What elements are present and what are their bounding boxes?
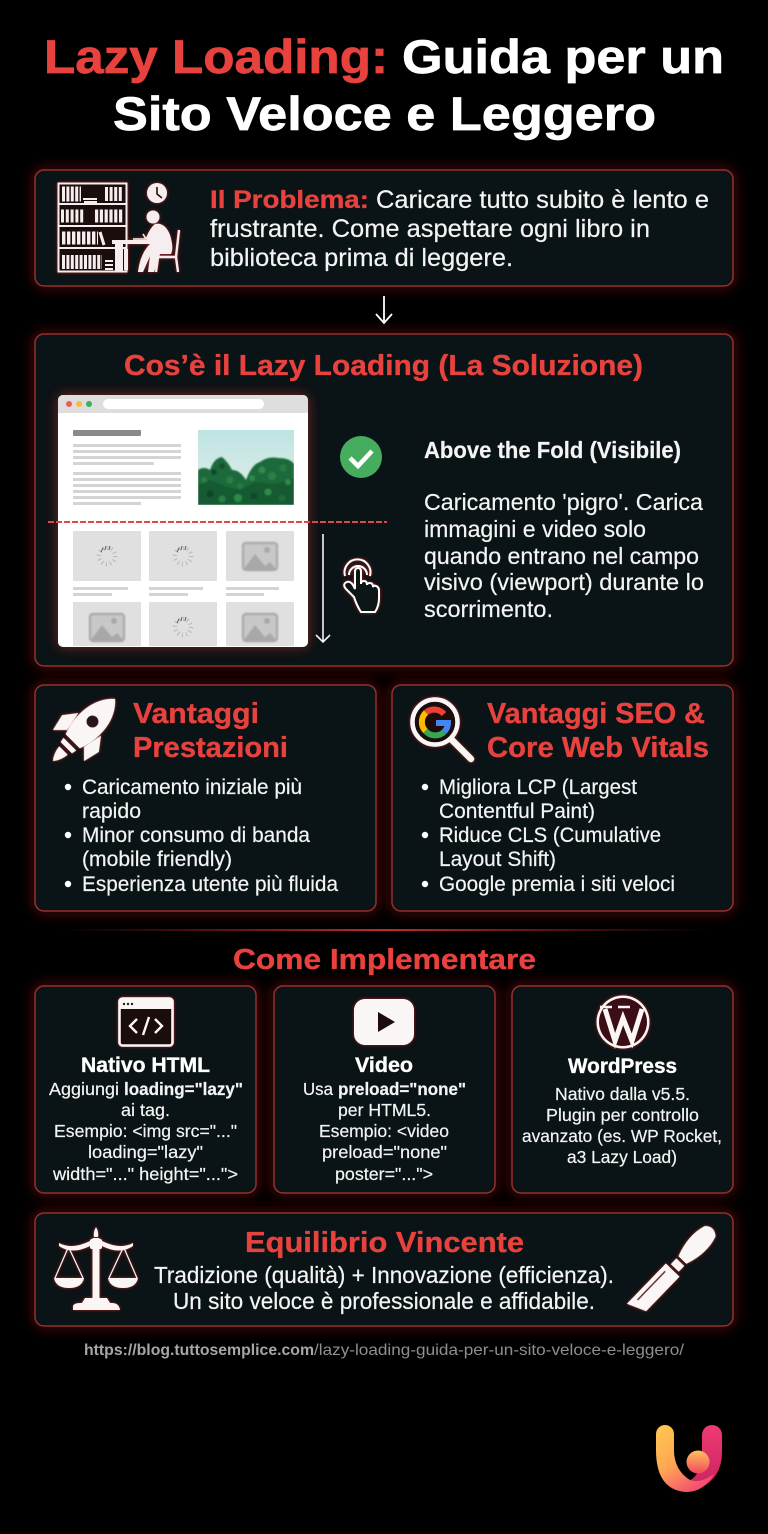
icon: check <box>340 436 382 478</box>
title: Lazy Loading: <box>44 30 388 83</box>
text: above the fold: Caricamento 'pigro'. Carica <box>424 489 703 515</box>
logo <box>656 1425 722 1492</box>
heading: prestazioni: Prestazioni <box>133 732 288 764</box>
text: equilibrio: Un sito veloce è professionale e affidabile. <box>173 1288 595 1314</box>
card: wordpress <box>512 986 733 1193</box>
icon: rocket <box>35 681 133 779</box>
title: Sito Veloce e Leggero <box>113 87 656 140</box>
list: prestazioni: (mobile friendly) <box>82 847 232 871</box>
text: above the fold: Above the Fold (Visibile) <box>424 437 681 463</box>
list: seo: Migliora LCP (Largest <box>439 775 637 799</box>
text: problema: Il Problema: <box>210 186 369 214</box>
text: wordpress: avanzato (es. WP Rocket, <box>522 1126 722 1146</box>
text: wordpress: Nativo dalla v5.5. <box>555 1084 690 1104</box>
text: nativo html: width="..." height="..."> <box>52 1164 238 1184</box>
text: video: Usa <box>303 1079 333 1099</box>
text: above the fold <box>424 437 704 622</box>
text: nativo html <box>49 1054 243 1184</box>
heading: prestazioni <box>133 698 288 764</box>
text: equilibrio: Equilibrio Vincente <box>245 1227 524 1259</box>
title <box>44 30 724 140</box>
text: wordpress <box>522 1055 722 1167</box>
text: wordpress: Plugin per controllo <box>546 1105 699 1125</box>
list: seo: Google premia i siti veloci <box>439 872 675 896</box>
panel: vantaggi prestazioni <box>35 681 376 911</box>
text: video: Video <box>355 1054 413 1077</box>
fold line <box>48 521 387 523</box>
arrow: down <box>376 296 392 323</box>
list: seo <box>422 775 675 896</box>
text: video: preload="none" <box>322 1142 447 1162</box>
text: equilibrio: Tradizione (qualità) + Innovazione (efficienza). <box>154 1262 614 1288</box>
heading: seo: Core Web Vitals <box>487 732 709 764</box>
list: prestazioni <box>65 775 338 896</box>
panel: soluzione <box>35 334 733 1492</box>
text: wordpress: a3 Lazy Load) <box>567 1147 677 1167</box>
card: nativo html <box>35 986 256 1193</box>
list: seo: Riduce CLS (Cumulative <box>439 823 661 847</box>
icon: code window <box>120 998 172 1046</box>
text: nativo html: Esempio: <img src="..." <box>54 1121 237 1141</box>
icon: scales <box>54 1227 138 1310</box>
text: video: Esempio: <video <box>319 1121 449 1141</box>
list: seo: Contentful Paint) <box>439 799 595 823</box>
title: Guida per un <box>402 30 724 83</box>
source url <box>84 1342 685 1359</box>
icon: google magnifier <box>412 700 471 759</box>
icon: wordpress logo <box>596 996 650 1048</box>
list: prestazioni: rapido <box>82 799 141 823</box>
panel: vantaggi seo <box>392 685 733 911</box>
text: video <box>303 1054 466 1184</box>
text: nativo html: loading="lazy" <box>88 1142 203 1162</box>
list: prestazioni: Minor consumo di banda <box>82 823 310 847</box>
text: above the fold: immagini e video solo <box>424 516 646 542</box>
text: nativo html: ai tag. <box>121 1100 170 1120</box>
heading: seo: Vantaggi SEO & <box>487 698 705 730</box>
text: above the fold: scorrimento. <box>424 596 553 622</box>
list: prestazioni: Esperienza utente più fluida <box>82 872 338 896</box>
text: above the fold: visivo (viewport) durante lo <box>424 569 704 595</box>
icon: chisel <box>627 1222 720 1317</box>
browser mockup <box>48 395 704 647</box>
text: problema: biblioteca prima di leggere. <box>210 244 513 272</box>
panel: equilibrio vincente <box>35 1213 733 1326</box>
text: problema: frustrante. Come aspettare ogni libro in <box>210 215 650 243</box>
text: equilibrio <box>154 1227 614 1314</box>
text: wordpress: WordPress <box>568 1055 677 1078</box>
heading: prestazioni: Vantaggi <box>133 698 259 730</box>
source url: /lazy-loading-guida-per-un-sito-veloce-e-leggero/ <box>314 1342 685 1359</box>
icon: play button <box>354 999 414 1045</box>
list: prestazioni: Caricamento iniziale più <box>82 775 302 799</box>
heading: seo <box>487 698 709 764</box>
photo: trees <box>198 430 294 505</box>
card: video <box>274 986 495 1193</box>
heading: come implementare: Come Implementare <box>233 944 536 976</box>
text: problema <box>210 186 709 272</box>
text: nativo html: Nativo HTML <box>81 1054 210 1077</box>
arrow: scroll <box>316 534 330 642</box>
text: problema: Caricare tutto subito è lento e <box>376 186 709 214</box>
heading: soluzione: Cos’è il Lazy Loading (La Soluzione) <box>124 350 643 382</box>
text: above the fold: quando entrano nel campo <box>424 543 699 569</box>
icon: hand scroll <box>344 559 379 612</box>
lazy placeholders <box>73 531 294 646</box>
text: video: preload="none" <box>338 1079 466 1099</box>
text: nativo html: Aggiungi <box>49 1079 119 1099</box>
text: video: poster="..."> <box>335 1164 433 1184</box>
text: video: per HTML5. <box>338 1100 431 1120</box>
source url: https://blog.tuttosemplice.com <box>84 1342 314 1359</box>
text: nativo html: loading="lazy" <box>124 1079 243 1099</box>
list: seo: Layout Shift) <box>439 847 556 871</box>
panel: il problema <box>35 170 733 286</box>
icon: person reading in library <box>58 183 179 272</box>
